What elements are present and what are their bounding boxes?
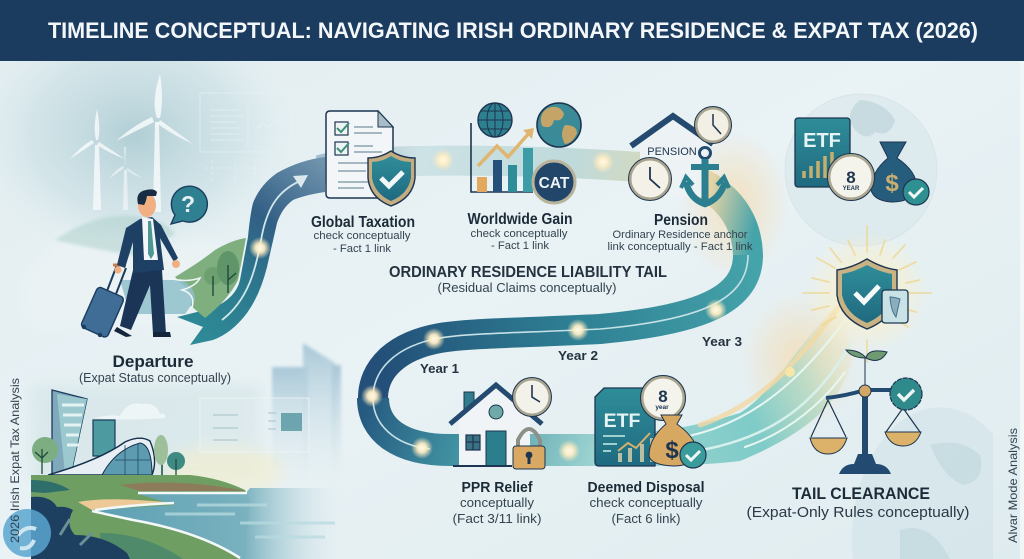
icon: question bubble: ? xyxy=(181,191,195,217)
icon: suitcase xyxy=(80,265,126,338)
side note: right: Alvar Mode Analysis xyxy=(1006,428,1020,543)
ribbon timeline xyxy=(177,157,853,466)
label: PPR relief: (Fact 3/11 link) xyxy=(452,511,542,526)
cloud and hill xyxy=(20,216,255,327)
icon: 8 year clock: YEAR xyxy=(843,186,860,192)
label: PPR relief: conceptually xyxy=(460,495,534,510)
side note: left: 2026 Irish Expat Tax Analysis xyxy=(8,378,22,543)
heading: ordinary residence liability tail: ORDINARY RESIDENCE LIABILITY TAIL xyxy=(389,264,667,281)
label: PPR relief xyxy=(452,479,542,526)
icon: deemed disposal ETF doc xyxy=(595,376,706,468)
icon: CAT badge: CAT xyxy=(539,175,570,192)
icon: 8 year clock: year xyxy=(655,404,669,411)
departure illustration xyxy=(80,186,246,338)
badge: bottom-left circle xyxy=(3,509,51,557)
label: global taxation: - Fact 1 link xyxy=(333,243,391,255)
globe watermark: top right xyxy=(785,94,937,246)
label: tail clearance: TAIL CLEARANCE xyxy=(792,484,930,503)
tower building xyxy=(52,390,115,474)
icon: top clock xyxy=(694,106,732,144)
icon: pension house anchor and clocks: PENSION xyxy=(647,146,697,158)
left scene: lower city and coast xyxy=(31,343,345,559)
label: worldwide gain: check conceptually xyxy=(470,228,568,240)
label: global taxation: Global Taxation xyxy=(311,214,415,231)
icon: money bag: $ xyxy=(665,437,679,464)
ribbon: lower section xyxy=(373,398,605,450)
icon: global taxation document with shield xyxy=(326,111,415,206)
ribbon: departure section xyxy=(177,157,325,345)
ribbon: center light line xyxy=(373,255,748,449)
label: global taxation xyxy=(311,214,415,255)
heading: ordinary residence liability tail xyxy=(389,264,667,295)
label: deemed disposal: Deemed Disposal xyxy=(588,479,704,496)
label: tail clearance: (Expat-Only Rules conceptually) xyxy=(746,504,970,521)
icon: clock xyxy=(512,378,552,416)
label: worldwide gain: - Fact 1 link xyxy=(491,240,549,252)
left scene: upper sky with turbines and dashboard xyxy=(20,74,292,327)
trees xyxy=(32,435,185,477)
icon: PPR house with clock and lock xyxy=(450,378,552,469)
land and water xyxy=(31,475,250,559)
scale pans xyxy=(811,400,920,437)
year labels: Year 3 xyxy=(702,334,742,349)
title bar xyxy=(0,0,1024,61)
icon: padlock xyxy=(513,429,545,469)
title bar: TIMELINE CONCEPTUAL: NAVIGATING IRISH ORDINARY RESIDENCE & EXPAT TAX (2026) xyxy=(48,18,978,43)
icon: check badge xyxy=(680,442,706,468)
icon: check badge xyxy=(903,179,929,205)
label: worldwide gain: Worldwide Gain xyxy=(468,211,572,228)
dashboard ghost panel xyxy=(200,93,292,186)
ghost ui panel xyxy=(200,398,309,452)
icon: question bubble xyxy=(171,186,207,224)
coast landscape xyxy=(120,238,246,318)
year labels: Year 1 xyxy=(420,361,459,376)
cloud xyxy=(95,403,165,420)
label: deemed disposal: (Fact 6 link) xyxy=(612,511,680,526)
year labels xyxy=(420,334,742,376)
year labels: Year 2 xyxy=(558,348,598,363)
globe watermark: bottom right xyxy=(852,407,993,559)
label: worldwide gain xyxy=(468,211,572,252)
ribbon: clearance fan xyxy=(600,303,853,466)
label: pension: link conceptually - Fact 1 link xyxy=(608,241,753,253)
icon: ETF clock and money bag group xyxy=(795,118,929,205)
heading: ordinary residence liability tail: (Residual Claims conceptually) xyxy=(438,280,616,295)
icon: large globe xyxy=(537,103,581,147)
label: departure xyxy=(79,353,231,385)
icon: money bag: $ xyxy=(885,170,899,197)
icon: 8 year clock: 8 xyxy=(658,387,668,406)
label: pension: Pension xyxy=(654,212,708,229)
icon: deemed disposal ETF doc: ETF xyxy=(604,410,640,432)
icon: worldwide gain chart xyxy=(471,103,581,203)
icon: small globe xyxy=(478,103,512,137)
ribbon: middle section xyxy=(373,255,748,398)
man in suit xyxy=(114,189,180,337)
ribbon: fan streaks xyxy=(665,308,850,452)
label: global taxation: check conceptually xyxy=(314,230,411,242)
ribbon: top section xyxy=(320,161,748,258)
label: departure: (Expat Status conceptually) xyxy=(79,371,231,385)
icon: anchor xyxy=(681,148,729,204)
label: PPR relief: PPR Relief xyxy=(462,479,533,496)
icon: scales with sprout xyxy=(810,350,922,474)
label: deemed disposal xyxy=(588,479,704,526)
icon: wind turbines xyxy=(70,74,193,212)
icon: harp card xyxy=(882,290,908,323)
ghost skyscrapers xyxy=(272,343,341,485)
arched building xyxy=(48,438,162,476)
label: departure: Departure xyxy=(112,353,194,371)
glowing beads on ribbon xyxy=(249,149,795,462)
label: deemed disposal: check conceptually xyxy=(590,495,703,510)
icon: left clock xyxy=(628,158,672,200)
icon: 8 year clock: 8 xyxy=(846,168,856,187)
label: pension xyxy=(608,212,753,253)
icon: arrow head on ribbon xyxy=(293,175,308,188)
icon: glowing shield with harp card xyxy=(803,226,931,362)
icon: ETF clock and money bag group: ETF xyxy=(803,130,841,152)
label: pension: Ordinary Residence anchor xyxy=(612,229,748,241)
icon: seal check xyxy=(890,378,922,410)
icon: 8 year clock xyxy=(640,376,686,420)
icon: shield check xyxy=(368,151,415,206)
icon: pension house anchor and clocks xyxy=(628,106,732,204)
label: tail clearance xyxy=(746,484,970,521)
icon: 8 year clock xyxy=(828,154,874,200)
